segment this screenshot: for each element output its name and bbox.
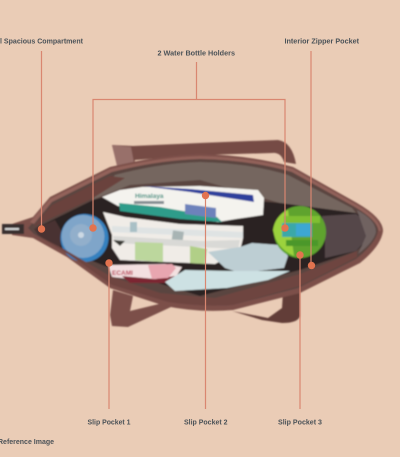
callout dots (38, 192, 315, 269)
lower front slip pocket rim (28, 231, 357, 306)
light blue diaper pack (165, 270, 290, 291)
dark pocket cavity (36, 190, 372, 296)
baby bottle (60, 214, 108, 262)
callout lines (42, 51, 311, 409)
callout line: Interior Zipper Pocket (310, 51, 312, 265)
Himalaya wipes pack (102, 186, 264, 222)
label: Slip Pocket 3: Slip Pocket 3 (278, 418, 322, 426)
right inner panel (357, 210, 376, 254)
label: 2 Water Bottle Holders: 2 Water Bottle Holders (158, 48, 235, 58)
bracket: 2 Water Bottle Holders (93, 62, 285, 229)
label: Slip Pocket 1: Slip Pocket 1 (88, 418, 130, 426)
upper fabric panel (92, 162, 356, 213)
bottom handle right (232, 289, 300, 323)
right pocket lining (322, 214, 370, 258)
upper zip rim highlight (30, 156, 381, 231)
bag photo (2, 140, 383, 327)
top handle (112, 140, 296, 169)
bottom handle left (110, 290, 171, 327)
pink pouch (108, 264, 182, 283)
label: Spacious Compartment: l Spacious Compartment (0, 36, 84, 46)
zipper pull (2, 224, 24, 234)
top handle left drop (112, 145, 134, 170)
grey rolled towel (208, 243, 288, 273)
green bottle lid (273, 206, 326, 258)
upper left strap rim (33, 176, 125, 227)
label: Interior Zipper Pocket: Interior Zipper Pocket (284, 36, 360, 46)
callout line: Slip Pocket 1 (108, 263, 110, 409)
label: Slip Pocket 2: Slip Pocket 2 (184, 418, 228, 426)
left pocket lining (34, 220, 62, 248)
pink pouch: ECAMI (112, 270, 133, 277)
bag inner fabric (28, 159, 378, 306)
Himalaya wipes pack: Himalaya (135, 193, 164, 200)
callout line: Slip Pocket 2 (204, 195, 206, 409)
folded towels stack (103, 212, 243, 264)
callout line: Slip Pocket 3 (299, 255, 301, 409)
callout line: Spacious Compartment (40, 51, 42, 229)
bag outer shell (12, 154, 383, 311)
